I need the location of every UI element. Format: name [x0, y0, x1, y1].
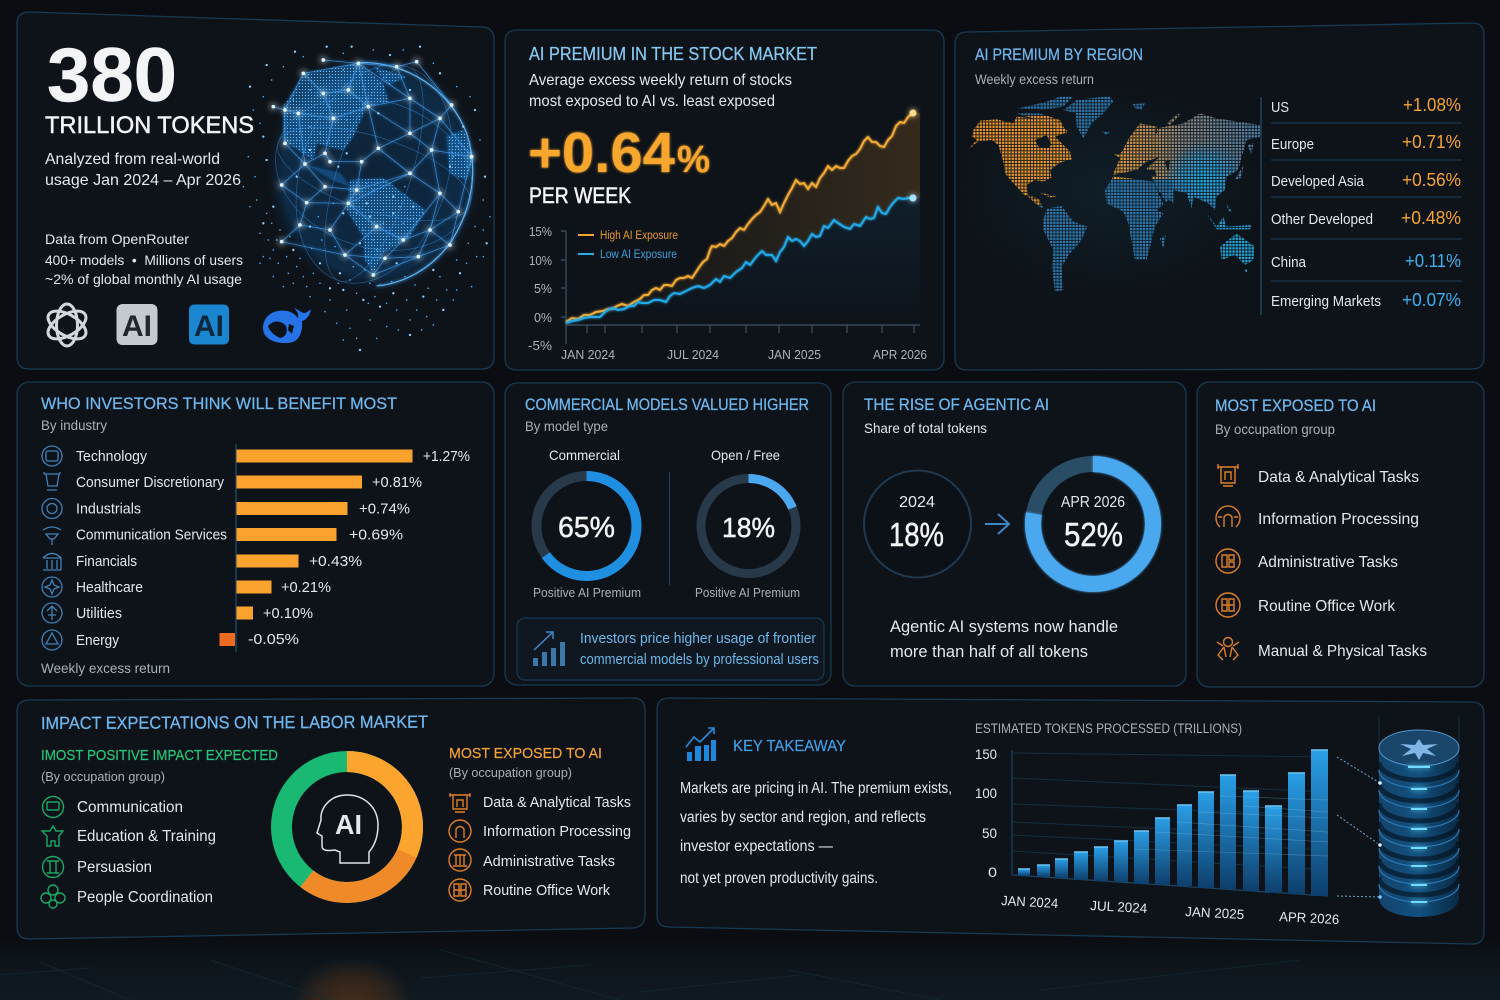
row: persuasion: Persuasion [77, 859, 152, 876]
description [529, 72, 792, 110]
description: Average excess weekly return of stocks [529, 72, 792, 89]
connector lines [1337, 757, 1380, 897]
row: Emerging Markets: Emerging Markets [1271, 293, 1381, 310]
donut: April 2026 [1033, 464, 1153, 584]
row: US: +1.08% [1403, 95, 1461, 115]
row: Healthcare: Healthcare [76, 580, 143, 596]
row: Financials: Financials [76, 554, 137, 570]
circle: 2024: 18% [889, 516, 944, 553]
row: Communication Services: Communication Services [76, 528, 227, 544]
donut: April 2026: APR 2026 [1061, 494, 1125, 511]
row: administrative tasks [1216, 549, 1398, 573]
axis labels: 15% [529, 224, 552, 239]
heading: KEY TAKEAWAY [733, 738, 846, 755]
takeaway text: Markets are pricing in AI. The premium exists, [680, 780, 952, 797]
takeaway text: investor expectations — [680, 838, 833, 855]
legend [578, 230, 678, 261]
axis labels: 0% [534, 310, 552, 325]
axis labels: 0 [988, 864, 997, 880]
donut: open or free: Positive AI Premium [695, 586, 800, 600]
globe illustration [243, 44, 492, 350]
axis labels [975, 746, 997, 880]
row: China: +0.11% [1405, 251, 1461, 271]
heading: IMPACT EXPECTATIONS ON THE LABOR MARKET [41, 712, 428, 733]
positive impact column: (By occupation group) [41, 769, 165, 784]
axis labels: APR 2026 [873, 347, 927, 362]
donut: April 2026: 52% [1064, 516, 1123, 553]
big value: +0.64 [528, 121, 675, 185]
data source: 400+ models • Millions of users [45, 252, 243, 268]
icon: growth chart [686, 728, 716, 761]
donut: commercial: Commercial [549, 447, 620, 463]
row: US: US [1271, 99, 1289, 116]
panel: who investors think will benefit most [17, 382, 494, 686]
row: administrative tasks [449, 849, 615, 871]
icon: rising bars [533, 632, 565, 666]
row: Utilities [42, 603, 313, 623]
dotted world map [968, 96, 1260, 292]
series: high AI exposure [566, 113, 913, 322]
takeaway text: varies by sector and region, and reflects [680, 809, 926, 826]
row: Financials: +0.43% [309, 553, 362, 570]
database cylinder [1378, 715, 1459, 917]
icon: blue AI badge [189, 304, 229, 344]
axis labels: -5% [528, 338, 552, 353]
bars [1018, 750, 1328, 896]
big value: % [677, 139, 710, 181]
footnote: Weekly excess return [41, 660, 170, 676]
row: data and analytical tasks [1218, 464, 1419, 486]
icon: AI head: AI [335, 809, 362, 840]
row: routine office work [1216, 593, 1396, 617]
axis labels: 5% [534, 281, 552, 296]
date labels: APR 2026 [1279, 909, 1340, 927]
model divider [668, 472, 670, 585]
circle: 2024 [864, 470, 971, 578]
positive impact column: IMOST POSITIVE IMPACT EXPECTED [41, 747, 278, 764]
donut: commercial [533, 447, 641, 600]
axis labels: 150 [975, 746, 997, 762]
panel: commercial models valued higher [505, 383, 831, 685]
row: Other Developed: Other Developed [1271, 211, 1373, 228]
subheading: TRILLION TOKENS [45, 112, 254, 139]
panel: AI premium in the stock market [505, 30, 944, 370]
donut: commercial: Positive AI Premium [533, 586, 641, 600]
subheading: Share of total tokens [864, 420, 987, 436]
row: Developed Asia [1271, 170, 1461, 190]
axis labels: 100 [975, 785, 997, 801]
row: Technology: Technology [76, 449, 148, 465]
row: communication [42, 796, 183, 818]
panel: 380 trillion tokens [17, 12, 494, 369]
row: Developed Asia: Developed Asia [1271, 173, 1365, 190]
axis labels: 10% [529, 253, 552, 268]
row: Consumer Discretionary: Consumer Discretionary [76, 475, 225, 491]
donut: open or free: Open / Free [711, 447, 780, 463]
date labels: JAN 2025 [1185, 904, 1245, 922]
row: routine office work: Routine Office Work [483, 882, 610, 899]
panel: AI premium by region [955, 23, 1484, 370]
row: Technology [42, 446, 470, 466]
row: data and analytical tasks: Data & Analytical Tasks [1258, 469, 1419, 486]
row: Healthcare [42, 577, 331, 597]
row: data and analytical tasks: Data & Analytical Tasks [483, 794, 631, 811]
row: Consumer Discretionary [44, 472, 422, 491]
takeaway text: not yet proven productivity gains. [680, 870, 878, 887]
row: people coordination [41, 885, 213, 908]
heading: WHO INVESTORS THINK WILL BENEFIT MOST [41, 394, 397, 413]
row: education and training: Education & Training [77, 828, 216, 845]
icon: whale logo [263, 308, 311, 343]
heading: AI PREMIUM IN THE STOCK MARKET [529, 44, 817, 64]
donut: commercial: 65% [558, 512, 615, 544]
donut: AI [282, 762, 412, 892]
row: information processing [1216, 506, 1419, 528]
icon: grey AI badge [116, 304, 158, 345]
chart title: ESTIMATED TOKENS PROCESSED (TRILLIONS) [975, 721, 1242, 736]
horizontal bar chart [42, 444, 470, 652]
row: Communication Services: +0.69% [349, 526, 403, 544]
description [45, 151, 241, 189]
bar chart: tokens processed [975, 746, 1340, 927]
icon: blue AI badge: AI [194, 310, 224, 343]
series: low AI exposure [566, 198, 913, 323]
donut: open or free: 18% [722, 512, 775, 543]
row: administrative tasks: Administrative Tasks [483, 853, 615, 870]
icon: grey AI badge: AI [122, 310, 152, 343]
row: information processing [449, 820, 631, 842]
row: Emerging Markets [1271, 290, 1461, 310]
row: manual and physical tasks [1217, 638, 1427, 660]
most exposed column: MOST EXPOSED TO AI [449, 745, 602, 762]
row: Emerging Markets: +0.07% [1402, 290, 1461, 310]
row: Communication Services [43, 526, 403, 545]
row: Utilities: Utilities [76, 606, 122, 622]
panel: key takeaway and tokens chart [657, 698, 1484, 944]
big number: 380 [47, 33, 177, 118]
arrow [985, 514, 1009, 534]
callout: commercial models by professional users [580, 652, 819, 668]
data source: Data from OpenRouter [45, 231, 189, 247]
caption [890, 617, 1118, 661]
row: Developed Asia: +0.56% [1402, 170, 1461, 190]
row: Europe [1271, 132, 1461, 153]
subheading: By model type [525, 418, 608, 434]
positive impact column [41, 747, 278, 908]
row: Energy [42, 630, 299, 650]
line chart [528, 110, 927, 362]
row: Energy: Energy [76, 633, 120, 649]
row: communication: Communication [77, 799, 183, 816]
description: usage Jan 2024 – Apr 2026 [45, 172, 241, 189]
row: education and training [42, 826, 216, 846]
per week label: PER WEEK [529, 183, 631, 208]
row: Utilities: +0.10% [263, 605, 313, 622]
row: Industrials [42, 498, 410, 518]
axis labels: JAN 2024 [561, 347, 615, 362]
circle: 2024: 2024 [899, 494, 935, 511]
description: Analyzed from real-world [45, 151, 220, 168]
date labels: JAN 2024 [1001, 893, 1059, 911]
row: information processing: Information Processing [483, 823, 631, 840]
heading: MOST EXPOSED TO AI [1215, 397, 1376, 415]
row: China: China [1271, 254, 1307, 271]
legend: Low AI Exposure [600, 249, 677, 261]
row: information processing: Information Processing [1258, 511, 1419, 528]
row: persuasion [42, 856, 152, 878]
row: Energy: -0.05% [248, 631, 299, 648]
row: Healthcare: +0.21% [281, 579, 331, 596]
panel: impact expectations on the labor market [17, 698, 645, 939]
row: administrative tasks: Administrative Tasks [1258, 554, 1398, 571]
row: routine office work [449, 879, 610, 901]
row: Financials [43, 553, 362, 570]
row: Technology: +1.27% [423, 448, 470, 465]
date labels: JUL 2024 [1090, 898, 1148, 916]
row: Industrials: +0.74% [359, 500, 410, 518]
region divider [1260, 97, 1262, 315]
subheading: Weekly excess return [975, 71, 1094, 87]
most exposed column: (By occupation group) [449, 765, 572, 780]
row: Other Developed [1271, 208, 1461, 228]
axis labels: JUL 2024 [667, 347, 719, 362]
row: Other Developed: +0.48% [1401, 208, 1461, 228]
panel: most exposed to AI [1197, 382, 1484, 687]
caption: more than half of all tokens [890, 642, 1088, 661]
row: China [1271, 251, 1461, 271]
row: Europe: Europe [1271, 136, 1314, 153]
end markers [910, 110, 916, 202]
row: US [1271, 95, 1461, 116]
data source [45, 231, 243, 287]
region table [1271, 95, 1462, 310]
callout [517, 618, 824, 680]
axis labels [528, 224, 927, 362]
date labels [1001, 893, 1340, 927]
takeaway text [680, 780, 952, 887]
row: routine office work: Routine Office Work [1258, 598, 1396, 615]
subheading: By industry [41, 417, 107, 433]
callout: Investors price higher usage of frontier [580, 631, 816, 647]
heading: COMMERCIAL MODELS VALUED HIGHER [525, 396, 809, 414]
data source: ~2% of global monthly AI usage [45, 271, 242, 287]
row: Europe: +0.71% [1402, 132, 1461, 152]
description: most exposed to AI vs. least exposed [529, 93, 775, 110]
row: Industrials: Industrials [76, 502, 141, 518]
subheading: By occupation group [1215, 421, 1335, 437]
row: people coordination: People Coordination [77, 889, 213, 906]
heading: AI PREMIUM BY REGION [975, 45, 1143, 64]
donut: open or free [695, 447, 800, 600]
legend: High AI Exposure [600, 230, 678, 242]
row: manual and physical tasks: Manual & Physical Tasks [1258, 643, 1427, 660]
most exposed column [449, 745, 631, 901]
icon: knot logo [44, 304, 90, 346]
panel: the rise of agentic AI [843, 382, 1186, 686]
heading: THE RISE OF AGENTIC AI [864, 396, 1049, 414]
axis labels: 50 [982, 825, 997, 841]
axis labels: JAN 2025 [768, 347, 821, 362]
occupation list [1216, 464, 1427, 660]
caption: Agentic AI systems now handle [890, 617, 1118, 636]
row: Consumer Discretionary: +0.81% [372, 474, 422, 491]
